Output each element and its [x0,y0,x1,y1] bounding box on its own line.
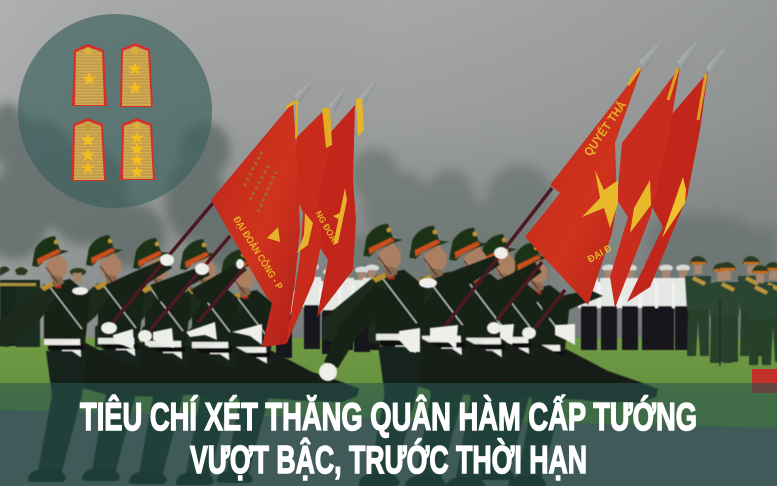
flag one right [525,67,642,305]
flags: left group [211,79,377,347]
flag poles: right group [445,188,565,328]
regiment emblem marks [244,152,276,212]
pole tips left [294,79,377,112]
marching soldiers: right group [323,224,658,486]
background: grass field [0,338,777,438]
flag poles: left group [113,203,244,330]
flag three left [306,105,356,317]
background: misty sky [0,0,777,340]
flag three right [627,72,708,302]
title line 2: VƯỢT BẬC, TRƯỚC THỜI HẠN [190,438,587,482]
military band [685,256,777,366]
circle badge with rank insignia [18,14,212,208]
epaulette: two stars [120,43,153,107]
flag lettering right: QUYẾT THẮ [580,97,629,159]
background sailors: left group [273,264,383,358]
tassels [286,101,297,138]
epaulette: four stars [120,118,155,180]
flag two left [262,112,332,347]
flag two right [610,67,680,308]
title [80,395,697,482]
background: misty tree line [0,103,777,283]
translucent title band [0,383,777,486]
flags: left group: NG ĐOÀ [313,209,339,244]
flag one left [211,102,300,347]
gloves: right group [319,247,575,381]
red podium box [752,369,777,393]
flag lettering left: ĐẠI ĐOÀN CÔNG - P [230,214,286,292]
background troops: left [0,266,86,347]
flags: right group: ĐẠI Đ [586,243,614,266]
marching soldiers: left group [0,235,359,485]
epaulette: three stars [71,118,106,181]
epaulette: one star [72,44,107,106]
background: parade road [0,410,777,486]
background sailors: right group [578,264,694,350]
flags: right group [525,41,725,308]
pole tips right [639,41,725,75]
gloves: left group [72,254,262,350]
